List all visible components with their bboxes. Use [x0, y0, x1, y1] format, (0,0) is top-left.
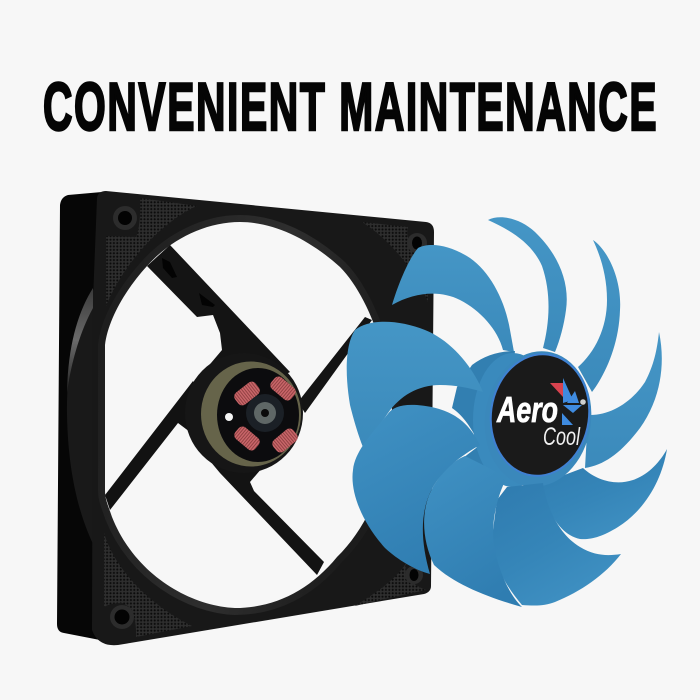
screw hole top-left: [113, 206, 137, 230]
screw hole bottom-right: [405, 566, 423, 584]
ring band: [105, 222, 392, 608]
hub circuit board: [201, 362, 301, 466]
blade top thin: [488, 217, 567, 352]
blade right: [585, 332, 662, 468]
blade lower-right: [543, 449, 667, 539]
frame barrel: [67, 285, 96, 550]
hub body: [452, 344, 600, 494]
logo Cool: Cool: [543, 423, 581, 451]
mesh top-left: [106, 198, 197, 306]
blade upper-right thin: [578, 240, 620, 392]
screw hole bottom-left: [110, 605, 134, 629]
hub housing: [185, 353, 303, 473]
hub ring: [482, 347, 598, 483]
spokes and motor hub: [105, 245, 372, 575]
logo registered mark: [580, 399, 586, 405]
logo: [496, 378, 586, 451]
frame front panel: [92, 191, 434, 645]
mounting hole: [225, 413, 233, 421]
spoke upper-right: [298, 317, 372, 413]
blade large bottom-left: [424, 456, 522, 607]
copper coil upper-right: [268, 374, 298, 403]
logo Aero: Aero: [496, 389, 558, 430]
mesh top-right: [362, 222, 428, 302]
hub face: [484, 349, 596, 481]
blade upper-left: [392, 245, 514, 352]
screw hole top-right: [407, 233, 427, 253]
mesh bottom-right: [355, 562, 426, 606]
copper coil lower-left: [232, 424, 262, 453]
copper coil lower-right: [270, 426, 300, 455]
bearing: [246, 394, 284, 432]
mesh bottom-left: [104, 533, 192, 637]
fan impeller: [347, 217, 667, 607]
frame opening: [105, 222, 392, 608]
frame back side: [57, 192, 102, 640]
barrel highlight: [67, 288, 93, 393]
spoke slot lower: [199, 293, 215, 307]
spoke lower-left: [105, 381, 205, 510]
spoke slot upper: [162, 258, 177, 278]
blade large left: [352, 405, 480, 574]
spoke lower-right: [205, 455, 324, 575]
motor stator: [217, 368, 299, 462]
copper coil upper-left: [232, 380, 262, 407]
spoke upper-left: [147, 245, 290, 392]
fan frame: [57, 191, 434, 645]
blade large left top: [347, 322, 483, 447]
title: CONVENIENT MAINTENANCE: [43, 68, 658, 145]
logo star: [550, 378, 582, 425]
blade bottom: [493, 483, 621, 606]
